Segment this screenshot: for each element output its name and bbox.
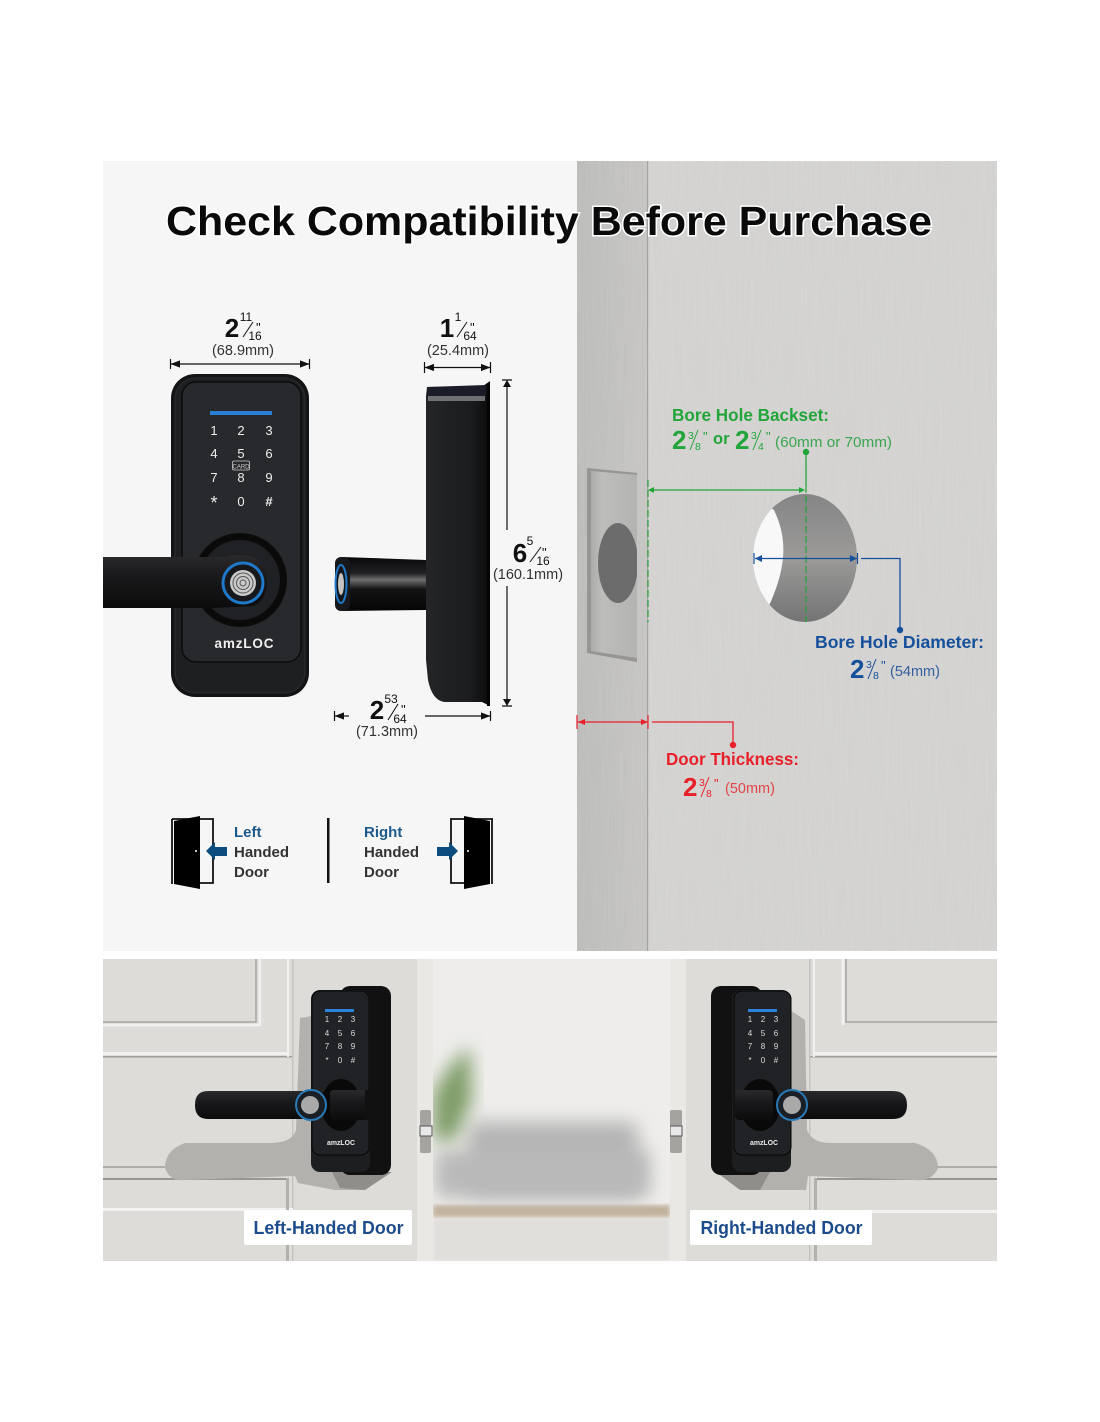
callout: bore hole backset: (60mm or 70mm) bbox=[775, 435, 892, 451]
dimension: depth: 1 bbox=[455, 310, 462, 324]
keypad: 5 bbox=[237, 446, 245, 461]
right lock: # bbox=[774, 1056, 779, 1065]
right handed door label: Handed bbox=[364, 844, 419, 861]
left handed door label: Handed bbox=[234, 844, 289, 861]
keypad: # bbox=[265, 494, 273, 509]
right lock: 8 bbox=[761, 1042, 766, 1051]
right lock: 6 bbox=[774, 1029, 779, 1038]
keypad: * bbox=[210, 493, 218, 513]
right handed door icon bbox=[437, 816, 493, 889]
dimension: height: (160.1mm) bbox=[493, 567, 563, 583]
shadow bbox=[745, 1010, 938, 1190]
keypad: 4 bbox=[210, 446, 218, 461]
right lock: 5 bbox=[761, 1029, 766, 1038]
side body bbox=[426, 381, 490, 706]
label: left-handed door: Left-Handed Door bbox=[254, 1218, 404, 1238]
keypad bbox=[210, 423, 273, 513]
callout: bore hole diameter: " bbox=[881, 658, 886, 673]
right lock: 1 bbox=[748, 1015, 753, 1024]
callout: bore hole backset: or bbox=[713, 430, 730, 448]
left lock: amzLOC bbox=[327, 1140, 355, 1147]
callout: bore hole backset: 2 bbox=[735, 425, 749, 455]
fingerprint bbox=[223, 563, 263, 603]
keypad: 0 bbox=[237, 494, 245, 509]
left handed door label: Door bbox=[234, 864, 269, 881]
right lock bbox=[711, 986, 907, 1175]
door edge bbox=[577, 161, 648, 951]
dimension: width: 11 bbox=[240, 310, 253, 324]
photo: left handed door bbox=[103, 959, 433, 1261]
dimension: lever length: 2 bbox=[370, 695, 384, 725]
photo: right handed door bbox=[670, 959, 997, 1261]
bore hole bbox=[753, 494, 857, 622]
dimension: width bbox=[170, 310, 310, 369]
label: right-handed door bbox=[690, 1210, 872, 1245]
right lock: 0 bbox=[761, 1056, 766, 1065]
right lock: 9 bbox=[774, 1042, 779, 1051]
callout: bore hole backset: " bbox=[703, 429, 708, 444]
label: left-handed door bbox=[244, 1210, 412, 1245]
dimension: lever length bbox=[334, 692, 490, 740]
callout: bore hole backset: 2 bbox=[672, 425, 686, 455]
callout: bore hole backset: 3 bbox=[751, 430, 757, 442]
keypad: 3 bbox=[265, 423, 273, 438]
card icon: CARD bbox=[232, 464, 250, 470]
door illustration bbox=[577, 161, 997, 951]
dimension: depth: (25.4mm) bbox=[427, 343, 489, 359]
status light bbox=[210, 411, 272, 415]
title: Check Compatibility Before Purchase bbox=[166, 198, 932, 244]
left handed door label: Left bbox=[234, 824, 262, 841]
dimension: height: 16 bbox=[536, 554, 550, 568]
callout: bore hole diameter: 8 bbox=[873, 670, 879, 682]
callout: door thickness: 2 bbox=[683, 772, 697, 802]
left lock: 8 bbox=[338, 1042, 343, 1051]
left lock: 9 bbox=[351, 1042, 356, 1051]
right lock: amzLOC bbox=[750, 1140, 778, 1147]
left handed door label bbox=[234, 824, 289, 881]
dimension: width: 2 bbox=[225, 313, 239, 343]
right lock: 3 bbox=[774, 1015, 779, 1024]
right handed door label: Door bbox=[364, 864, 399, 881]
callout: door thickness: (50mm) bbox=[725, 781, 775, 797]
door panels bbox=[103, 959, 256, 1022]
callout: bore hole diameter: 2 bbox=[850, 654, 864, 684]
right handed door label bbox=[364, 824, 419, 881]
rose bbox=[193, 533, 287, 627]
left handed door icon bbox=[172, 816, 227, 889]
keypad: 1 bbox=[210, 423, 218, 438]
left lock: 5 bbox=[338, 1029, 343, 1038]
left lock: 0 bbox=[338, 1056, 343, 1065]
side view of lock bbox=[335, 381, 490, 706]
callout: bore hole backset: 3 bbox=[688, 430, 694, 442]
front view of lock bbox=[103, 374, 309, 697]
callout: bore hole backset: Bore Hole Backset: bbox=[672, 405, 829, 425]
door panels bbox=[846, 959, 997, 1022]
hinge/latch bbox=[420, 1110, 431, 1153]
dimension: width: (68.9mm) bbox=[212, 343, 274, 359]
dimension: lever length: " bbox=[401, 702, 406, 717]
callout: bore hole diameter bbox=[754, 553, 984, 684]
left lock: 3 bbox=[351, 1015, 356, 1024]
right lock: * bbox=[748, 1056, 752, 1065]
callout: door thickness: 8 bbox=[706, 788, 712, 800]
dimension: lever length: 53 bbox=[384, 692, 398, 706]
dimension: depth: " bbox=[470, 320, 475, 335]
left lock bbox=[195, 986, 391, 1175]
left lock: 1 bbox=[325, 1015, 330, 1024]
callout: door thickness: Door Thickness: bbox=[666, 749, 799, 769]
callout: bore hole diameter: 3 bbox=[866, 659, 872, 671]
dimension: height: 5 bbox=[527, 534, 534, 548]
callout: door thickness bbox=[577, 715, 799, 802]
shadow bbox=[165, 1013, 365, 1190]
dimension: height bbox=[493, 380, 563, 706]
callout: bore hole backset: 8 bbox=[695, 441, 701, 453]
callout: bore hole backset: " bbox=[766, 429, 771, 444]
side handle bbox=[342, 557, 426, 611]
right lock: 4 bbox=[748, 1029, 753, 1038]
dimension: width: 16 bbox=[248, 329, 262, 343]
right lock: 7 bbox=[748, 1042, 753, 1051]
keypad: 2 bbox=[237, 423, 245, 438]
left lock: 2 bbox=[338, 1015, 343, 1024]
callout: door thickness: " bbox=[714, 776, 719, 791]
dimension: width: " bbox=[256, 320, 261, 335]
callout: bore hole backset: 4 bbox=[758, 441, 764, 453]
door face bbox=[648, 161, 997, 951]
dimension: height: " bbox=[542, 545, 547, 560]
keypad: 7 bbox=[210, 470, 218, 485]
dimension: depth: 1 bbox=[440, 313, 454, 343]
callout: bore hole diameter: (54mm) bbox=[890, 664, 940, 680]
label: right-handed door: Right-Handed Door bbox=[700, 1218, 862, 1238]
door edge bbox=[670, 959, 686, 1261]
dimension: lever length: 64 bbox=[393, 712, 407, 726]
right handed door label: Right bbox=[364, 824, 402, 841]
background panel: left bbox=[103, 161, 577, 951]
card icon bbox=[232, 461, 250, 470]
dimension: height: 6 bbox=[513, 538, 527, 568]
dimension: depth: 64 bbox=[463, 329, 477, 343]
keypad: 8 bbox=[237, 470, 245, 485]
left lock: 6 bbox=[351, 1029, 356, 1038]
callout: bore hole diameter: Bore Hole Diameter: bbox=[815, 632, 984, 652]
left lock: * bbox=[325, 1056, 329, 1065]
keypad: 6 bbox=[265, 446, 273, 461]
callout: bore hole backset bbox=[648, 405, 892, 622]
brand: amzLOC bbox=[214, 636, 274, 651]
dimension: lever length: (71.3mm) bbox=[356, 724, 418, 740]
right lock: 2 bbox=[761, 1015, 766, 1024]
callout: door thickness: 3 bbox=[699, 777, 705, 789]
latch recess bbox=[587, 468, 638, 662]
door edge bbox=[417, 959, 433, 1261]
photo: blurred room background bbox=[433, 959, 670, 1261]
dimension: depth bbox=[424, 310, 490, 373]
lever bbox=[103, 555, 267, 608]
keypad: 9 bbox=[265, 470, 273, 485]
left lock: 4 bbox=[325, 1029, 330, 1038]
left lock: 7 bbox=[325, 1042, 330, 1051]
left lock: # bbox=[351, 1056, 356, 1065]
